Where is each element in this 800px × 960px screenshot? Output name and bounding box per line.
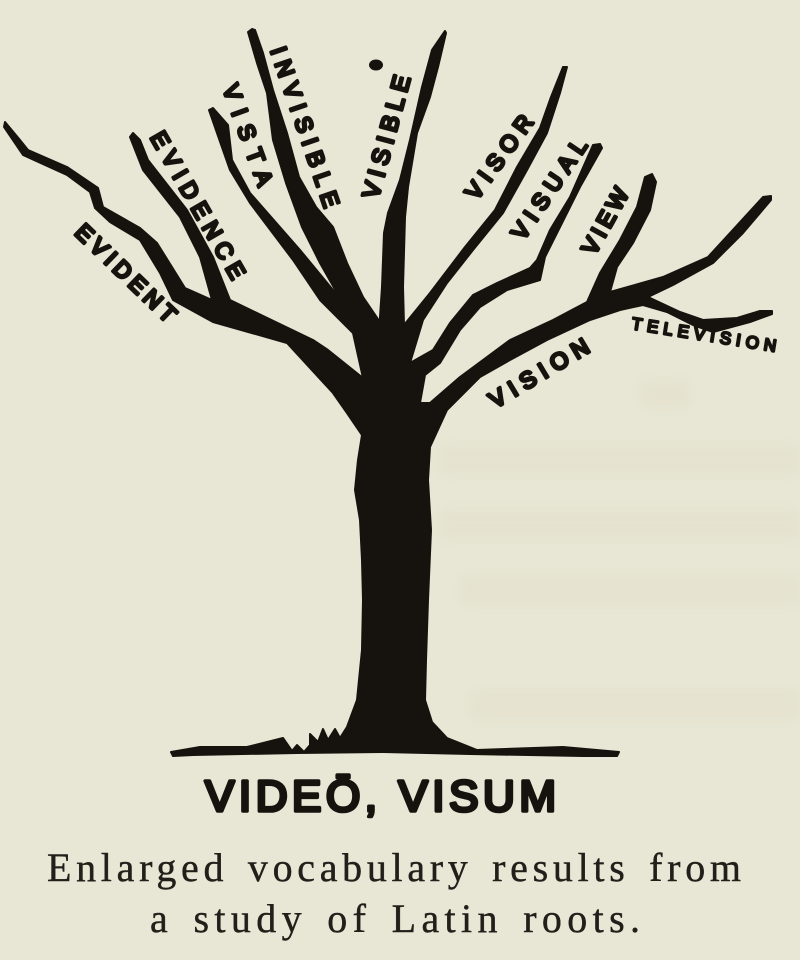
label: VISTA: VISTA (218, 81, 279, 190)
caption line 1: Enlarged vocabulary results from (47, 845, 741, 890)
label: VISUAL: VISUAL (506, 133, 592, 244)
label: VISOR: VISOR (460, 110, 538, 204)
label: TELEVISION: TELEVISION (630, 314, 778, 356)
title: VIDEŌ, VISUM (205, 772, 556, 821)
caption (47, 845, 741, 941)
caption line 2: a study of Latin roots. (150, 896, 640, 941)
tree with branches and ground (4, 29, 772, 756)
label: VIEW: VIEW (576, 183, 634, 259)
dot above VISIBLE (369, 60, 383, 70)
label: EVIDENT: EVIDENT (70, 218, 182, 328)
label: EVIDENCE: EVIDENCE (145, 127, 251, 283)
label: VISION: VISION (484, 333, 594, 413)
label: INVISIBLE: INVISIBLE (265, 43, 345, 211)
label: VISIBLE: VISIBLE (358, 73, 416, 201)
